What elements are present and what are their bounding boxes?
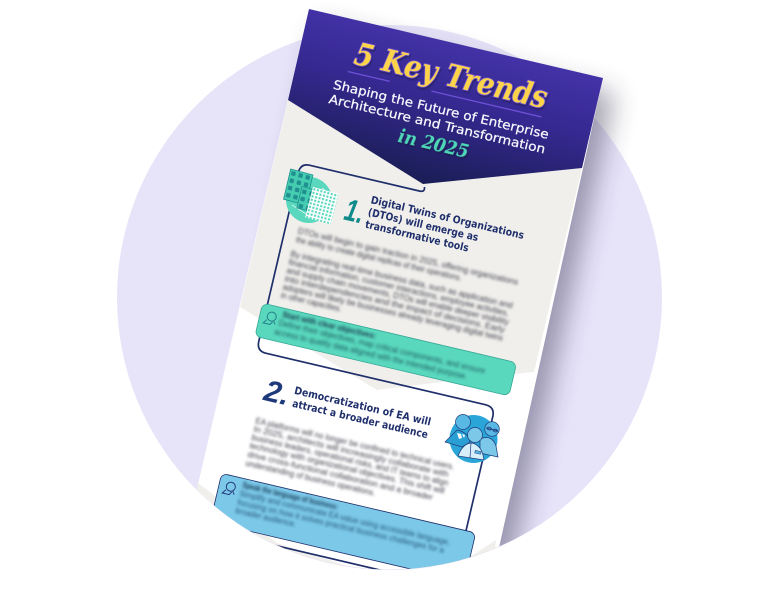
body text 1: DTOs will begin to gain traction in 2025, offering organizations <box>297 226 519 287</box>
number 1: 1. <box>341 192 368 230</box>
background circle <box>117 25 662 570</box>
callout 1 <box>255 303 517 396</box>
body text 1 <box>280 226 519 352</box>
header banner <box>288 9 603 184</box>
infographic page <box>180 9 603 593</box>
page shadow <box>205 25 615 593</box>
icon: people group <box>445 414 499 463</box>
body text 2 <box>244 416 454 501</box>
callout 2 <box>214 474 475 569</box>
heading 1: (DTOs) will emerge as <box>367 207 480 244</box>
body text 1: financial information, customer interactions, employee activities, <box>288 258 510 318</box>
icon: digital twin building <box>282 169 339 224</box>
subtitle year: in 2025 <box>396 125 471 163</box>
body text 2: EA platforms will no longer be confined to technical users. <box>255 416 455 472</box>
body text 2: business leaders, operational risks, and IT teams to align <box>251 433 449 488</box>
heading 1: Digital Twins of Organizations <box>370 194 525 242</box>
body text 2: understanding of business operations. <box>245 459 376 498</box>
heading 1: transformative tools <box>364 219 470 255</box>
rotated page content <box>214 42 550 570</box>
body text 1: and supply chain movements, DTOs will enable deeper visibility <box>286 266 510 327</box>
callout 2 text: Speak the language of business: <box>242 481 339 512</box>
beige lower background <box>197 483 496 569</box>
body text 2: In 2025, architects will increasingly collaborate with <box>253 425 449 479</box>
body text 1: in other capacities. <box>280 291 342 314</box>
body text 2: drive cross-functional collaboration and a broader <box>247 450 434 502</box>
subtitle line two: Architecture and Transformation <box>327 91 547 156</box>
callout 1 text: Start with clear objectives: <box>282 310 377 341</box>
card outline connector <box>258 164 494 570</box>
body text 1: into interdependencies and the impact of decisions. Early <box>284 274 506 335</box>
body text 1: the ability to create digital replicas of their operations. <box>295 235 463 283</box>
infographic scene <box>117 9 662 570</box>
callout 1 text: Define their objectives, map critical components, and ensure <box>278 318 486 376</box>
icon: callout 1 badge <box>263 311 278 326</box>
icon: callout 2 badge <box>222 481 237 496</box>
beige upper background <box>240 100 582 390</box>
subtitle line one: Shaping the Future of Enterprise <box>332 77 551 142</box>
callout 2 text: focusing on how it solves practical business challenges for a <box>236 498 445 555</box>
heading 2: Democratization of EA will <box>293 385 432 429</box>
title rule left <box>348 72 390 81</box>
title: 5 Key Trends <box>351 36 551 116</box>
page sheet <box>185 9 603 593</box>
title rule right <box>431 91 541 117</box>
body text 1: By integrating real-time business data, such as application and <box>290 249 514 310</box>
callout 2 text: broader audience. <box>235 506 297 529</box>
heading 2: attract a broader audience <box>291 398 429 441</box>
callout 2 text: Simplify and communicate EA value using accessible language, <box>239 489 451 547</box>
callout 1 text: access to quality data aligned with the intended purpose. <box>273 327 468 381</box>
body text 1: adopters will likely be businesses already leveraging digital twins <box>282 282 504 343</box>
body text 2: technology with organizational objectives. This shift will <box>249 441 446 496</box>
number 2: 2. <box>260 374 293 412</box>
